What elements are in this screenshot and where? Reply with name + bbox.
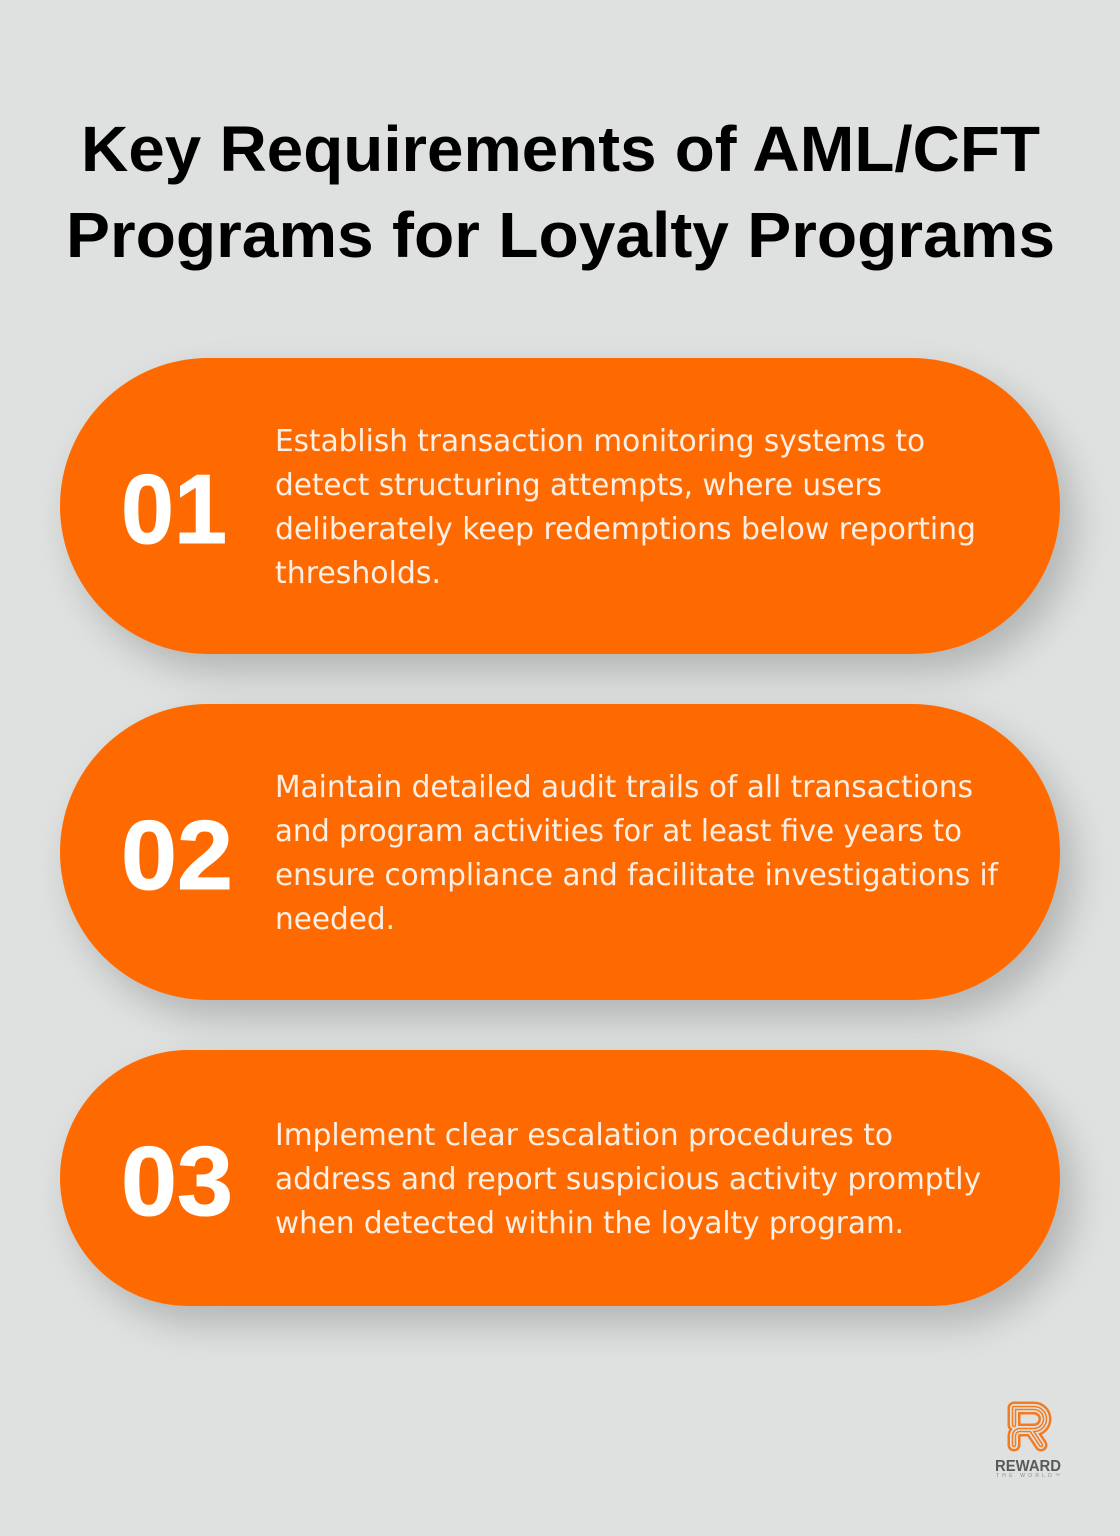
title: Key Requirements of AML/CFT — [81, 113, 1040, 185]
panel: requirement 02 — [60, 704, 1060, 1000]
text block 02: Maintain detailed audit trails of all transactions — [275, 770, 973, 805]
number 02: 02 — [121, 800, 233, 910]
text block 01 — [275, 424, 976, 591]
wordmark: REWARD — [995, 1458, 1061, 1475]
text block 02 — [275, 770, 999, 937]
text block 03: address and report suspicious activity promptly — [275, 1162, 981, 1197]
number 01: 01 — [121, 454, 227, 564]
title — [66, 113, 1055, 271]
number 03: 03 — [121, 1126, 233, 1236]
text block 01: thresholds. — [275, 556, 441, 591]
title: Programs for Loyalty Programs — [66, 199, 1055, 271]
icon: R mark — [1014, 1408, 1045, 1445]
text block 02: ensure compliance and facilitate investigations if — [275, 858, 999, 893]
panel: requirement 03 — [60, 1050, 1060, 1306]
text block 02: needed. — [275, 902, 395, 937]
text block 03: when detected within the loyalty program. — [275, 1206, 904, 1241]
logo: Reward the World — [995, 1402, 1061, 1479]
text block 01: deliberately keep redemptions below reporting — [275, 512, 976, 547]
text block 03: Implement clear escalation procedures to — [275, 1118, 893, 1153]
text block 01: Establish transaction monitoring systems to — [275, 424, 925, 459]
text block 02: and program activities for at least five years to — [275, 814, 962, 849]
panel: requirement 01 — [60, 358, 1060, 654]
text block 03 — [275, 1118, 981, 1241]
text block 01: detect structuring attempts, where users — [275, 468, 882, 503]
tagline: THE WORLD™ — [996, 1473, 1060, 1479]
